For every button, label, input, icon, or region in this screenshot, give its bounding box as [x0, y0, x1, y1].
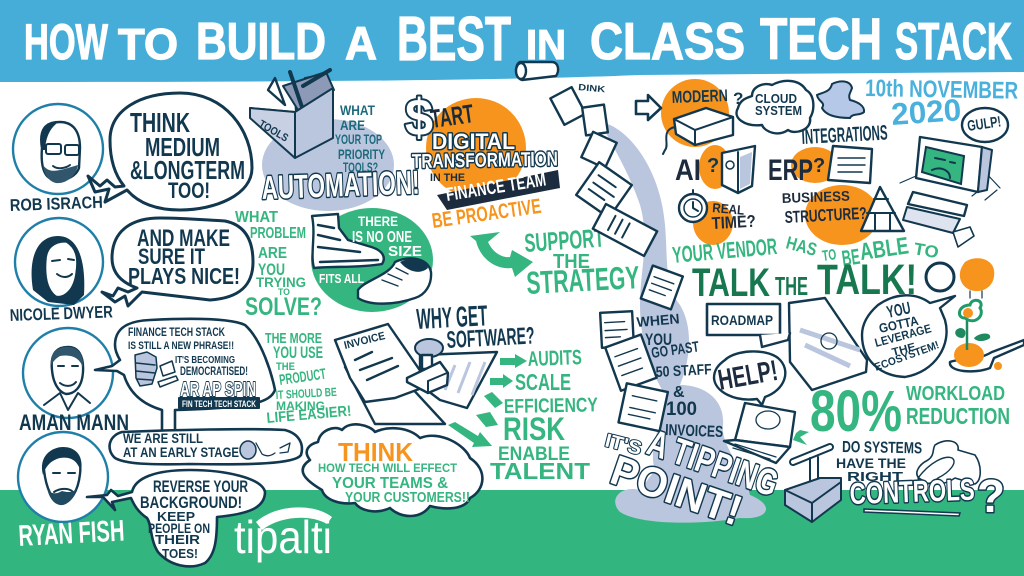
text: your vendor has to be able to: HAS — [784, 233, 819, 260]
invoice 9 — [618, 383, 668, 431]
text: there is no one size: IS NO ONE — [352, 229, 412, 246]
text: your vendor has to be able to — [671, 232, 940, 271]
question: what are your top priority tools: TOOLS? — [343, 159, 378, 175]
speech bubble: and make sure it plays nice — [102, 218, 253, 306]
invoice sheet: INVOICE — [343, 330, 386, 352]
portrait: Aman — [23, 328, 113, 418]
banner: finance team — [437, 169, 560, 210]
arrow: roadmap pointer — [760, 333, 790, 347]
text: support the strategy: THE — [553, 251, 590, 273]
speech bubble: finance tech stack: DEMOCRATISED! — [180, 364, 248, 378]
portrait: Ryan — [18, 432, 108, 522]
name: Aman Mann: AMAN MANN — [19, 410, 129, 435]
speech bubble: reverse your background — [87, 470, 265, 566]
speech bubble: and make sure it plays nice: PLAYS NICE! — [128, 263, 240, 289]
speech bubble: finance tech stack: IT'S BECOMING — [175, 355, 235, 366]
topic: real time: TIME? — [711, 212, 756, 233]
text: be proactive: BE PROACTIVE — [430, 195, 543, 233]
icon: map — [789, 298, 867, 390]
arrow: 80% to laptop — [793, 430, 809, 445]
title banner: BEST — [397, 5, 511, 74]
speech bubble: finance tech stack: FIN TECH TECH STACK — [182, 399, 256, 409]
text: when you go past: INVOICES — [665, 422, 724, 441]
name: Rob Israch: ROB ISRACH — [9, 193, 103, 215]
text: there is no one size: SIZE — [388, 243, 422, 260]
heading: talk the talk: THE — [775, 271, 808, 301]
right-top: modern: ? — [733, 89, 743, 108]
speech bubble: think medium and long term: THINK — [130, 107, 190, 138]
topic: AI: AI — [675, 154, 701, 187]
topic: business structure: BUSINESS — [782, 188, 850, 206]
speech bubble: you gotta leverage the ecosystem: GOTTA — [878, 313, 920, 336]
topic: ERP: ? — [813, 155, 825, 177]
icon: laptop — [724, 403, 795, 463]
speech bubble: finance tech stack — [95, 319, 275, 432]
invoice 5 — [593, 204, 657, 256]
title banner: IN — [526, 21, 566, 68]
speech bubble: reverse your background: TOES! — [162, 546, 198, 561]
text: do systems have the right: HAVE THE — [836, 455, 906, 471]
topic: real time — [679, 190, 756, 245]
panel: Rob Israch — [9, 93, 252, 215]
invoice 6 — [641, 266, 683, 309]
heading: it's a tipping point — [603, 422, 783, 534]
icon: toolbox — [250, 70, 334, 158]
invoice 3 — [581, 132, 617, 168]
speech bubble: reverse your background: BACKGROUND! — [140, 493, 242, 512]
list: software benefits — [490, 346, 599, 484]
speech bubble: you gotta leverage the ecosystem: ECOSYSTEM! — [873, 339, 941, 374]
cloud: think how tech will affect: THINK — [338, 437, 413, 467]
question: what problem are you trying to solve: WHAT — [235, 209, 278, 226]
list: software benefits: ENABLE — [498, 444, 570, 465]
text: your vendor has to be able to: TO — [912, 239, 940, 262]
text: support the strategy: STRATEGY — [525, 259, 640, 301]
cloud: think how tech will affect: HOW TECH WILL EFFECT — [318, 461, 458, 475]
speech bubble: finance tech stack: IS STILL A NEW PHRASE!! — [128, 340, 234, 352]
speech bubble: finance tech stack: FINANCE TECH STACK — [128, 325, 225, 339]
label: dink: DINK — [578, 82, 606, 94]
name: Ryan Fish: RYAN FISH — [18, 514, 125, 553]
cloud: think how tech will affect: YOUR TEAMS & — [332, 475, 448, 492]
speech bubble: think medium and long term: MEDIUM — [145, 132, 220, 162]
speech bubble: and make sure it plays nice: SURE IT — [138, 244, 205, 269]
text: there is no one size: THERE — [358, 213, 398, 229]
text: when you go past: GO PAST — [650, 338, 700, 362]
icon: cloud system: SYSTEM — [755, 104, 802, 118]
icon: outline arrow — [636, 95, 661, 120]
topic: business structure — [782, 185, 904, 245]
text: the more you use the product: LIFE EASIER! — [266, 403, 352, 427]
icon: toilet roll — [240, 441, 290, 459]
invoice sheet — [335, 324, 430, 402]
text: the more you use the product: YOU USE — [273, 343, 323, 362]
panel: no one size fits all — [311, 208, 433, 312]
title banner: CLASS — [590, 13, 745, 71]
text: support the strategy: SUPPORT — [523, 222, 605, 258]
text: there is no one size: FITS ALL — [319, 271, 364, 286]
speech bubble: think medium and long term: TOO! — [168, 178, 210, 203]
text: the more you use the product: PRODUCT — [278, 366, 327, 389]
topic: AI — [675, 145, 755, 193]
question: what problem are you trying to solve: ARE — [258, 245, 287, 262]
speech bubble: think medium and long term: &LONGTERM — [130, 155, 245, 185]
question: what are your top priority tools: YOUR TOP — [335, 131, 382, 147]
text: integrations: INTEGRATIONS — [801, 122, 888, 149]
panel: start digital transformation: DIGITAL — [432, 129, 515, 154]
speech bubble: help: HELP! — [716, 355, 780, 397]
cloud: think how tech will affect: YOUR CUSTOMERS!! — [345, 489, 470, 506]
text: your vendor has to be able to: BE — [840, 244, 862, 271]
topic: business structure: STRUCTURE? — [784, 204, 867, 227]
list: software benefits: EFFICIENCY — [504, 394, 599, 418]
speech bubble: you gotta leverage the ecosystem: THE — [891, 341, 917, 359]
text: do systems have the right: RIGHT — [847, 469, 903, 484]
list: software benefits: TALENT — [490, 458, 590, 484]
label: roadmap — [707, 304, 780, 335]
speech bubble: reverse your background: REVERSE YOUR — [153, 477, 248, 496]
panel: gulp computer — [900, 108, 1008, 247]
icon: stack of blocks and computer — [135, 352, 178, 387]
green arrows — [448, 354, 527, 447]
icon: cloud system — [737, 81, 813, 133]
question: what are your top priority tools — [335, 102, 385, 175]
arrow: to support the strategy — [470, 232, 533, 277]
panel: Nicole Dwyer — [9, 218, 253, 325]
speech bubble: finance tech stack: AR AP SPIN — [180, 379, 256, 401]
speech bubble: you gotta leverage the ecosystem: LEVERAGE — [873, 321, 933, 350]
heading: it's a tipping point: A TIPPING — [642, 422, 783, 505]
icon: puzzle piece — [817, 81, 864, 118]
question: what are your top priority tools: ARE — [340, 117, 365, 133]
panel: start digital transformation: TRANSFORMATION — [412, 148, 558, 173]
text: there is no one size — [319, 213, 422, 286]
speech bubble: we are still at an early stage: AT AN EARLY STAGE — [123, 444, 239, 460]
question: what are your top priority tools: PRIORITY — [338, 146, 385, 162]
question: what problem are you trying to solve: YOU — [258, 260, 285, 279]
portrait: Rob — [13, 104, 103, 194]
heading: it's a tipping point: POINT! — [605, 446, 748, 534]
text: when you go past: YOU — [645, 330, 672, 349]
speech bubble: you gotta leverage the ecosystem — [862, 295, 955, 377]
topic: real time: REAL — [712, 200, 745, 218]
speech bubble: reverse your background: PEOPLE ON — [148, 520, 210, 536]
text: your vendor has to be able to: TO — [821, 246, 838, 265]
invoice chain — [550, 87, 683, 431]
right-top: modern — [636, 79, 743, 154]
logo: tipalti: tipalti — [234, 511, 332, 563]
icon: plant on trowel — [950, 300, 1024, 371]
icon: paper roll — [516, 62, 558, 80]
icon: stopwatch — [679, 190, 707, 222]
heading: talk the talk: TALK — [692, 261, 770, 305]
text: when you go past: & — [673, 384, 685, 401]
speech bubble: we are still at an early stage — [110, 429, 302, 464]
heading: talk the talk — [692, 256, 917, 305]
icon: document — [828, 146, 872, 183]
speech bubble: and make sure it plays nice: AND MAKE — [137, 225, 230, 252]
heading: why get software — [416, 300, 535, 354]
back sheets — [345, 352, 497, 424]
stat: 80% workload reduction: WORKLOAD — [906, 383, 1005, 405]
icon: old computer — [900, 137, 1000, 247]
text: the more you use the product: IT SHOULD BE — [275, 385, 337, 402]
topic: ERP — [768, 146, 872, 187]
name: Nicole Dwyer: NICOLE DWYER — [9, 302, 113, 325]
text: the more you use the product — [265, 330, 352, 427]
icon: tower speaker — [722, 146, 755, 193]
title banner — [0, 0, 1024, 82]
green footer band — [0, 490, 1024, 576]
invoice 8 — [605, 335, 657, 391]
icon: pyramid — [861, 187, 904, 231]
stat: 80% workload reduction: 80% — [810, 379, 902, 444]
text: your vendor has to be able to: ABLE — [858, 232, 910, 266]
list: software benefits: RISK — [503, 411, 565, 447]
question: what problem are you trying to solve: PROBLEM — [250, 225, 306, 242]
title banner: BUILD — [196, 13, 326, 71]
roadmap — [707, 298, 867, 390]
blob behind automation — [262, 119, 394, 211]
banner: finance team: FINANCE TEAM — [444, 169, 548, 206]
heading: why get software: SOFTWARE? — [446, 322, 535, 354]
text: your vendor has to be able to: YOUR VENDOR — [671, 233, 778, 268]
text: when you go past: 100 — [666, 399, 697, 420]
text: when you go past: 50 STAFF — [655, 361, 712, 381]
icon: game controller puzzle — [917, 441, 980, 484]
text: do systems have the right: DO SYSTEMS — [842, 439, 922, 457]
title banner: TECH — [760, 7, 882, 72]
panel: Aman Mann — [19, 319, 302, 464]
label: roadmap: ROADMAP — [711, 312, 773, 328]
date: 2020 — [890, 92, 962, 132]
cloud: think how tech will affect — [303, 424, 482, 516]
text: when you go past: WHEN — [636, 310, 680, 330]
text: the more you use the product: THE — [276, 361, 295, 373]
speech bubble: we are still at an early stage: WE ARE STILL — [123, 430, 203, 446]
speech bubble: reverse your background: THEIR — [155, 532, 201, 547]
list: software benefits: AUDITS — [527, 346, 582, 371]
title banner: HOW — [24, 14, 109, 70]
title banner: A — [345, 17, 377, 69]
icon: orange chick — [960, 258, 994, 298]
text: do systems have the right — [836, 439, 922, 484]
icon: server box — [663, 108, 733, 154]
invoice 7 — [600, 311, 634, 348]
question: what are your top priority tools: WHAT — [340, 102, 375, 118]
icon: ring — [926, 263, 954, 291]
topic: AI: ? — [707, 155, 719, 177]
invoice 2 — [582, 105, 608, 135]
text: when you go past — [636, 310, 724, 441]
heading: talk the talk: TALK! — [817, 256, 917, 304]
heading: why get software: WHY GET — [416, 300, 488, 336]
panel: start digital transformation: TART — [429, 98, 475, 134]
question: what problem are you trying to solve: TRYING — [256, 274, 306, 290]
icon: cloud system: CLOUD — [755, 92, 797, 106]
icon: joystick box — [785, 447, 841, 522]
question: what problem are you trying to solve — [235, 209, 322, 321]
heading: it's a tipping point: IT'S — [603, 430, 644, 460]
panel: start digital transformation: IN THE — [430, 172, 465, 184]
speech bubble: help — [714, 351, 785, 405]
speech bubble: you gotta leverage the ecosystem: YOU — [885, 298, 912, 322]
icon: dollar sign: $ — [405, 89, 433, 147]
invoice 1 — [550, 87, 586, 125]
title banner: TO — [118, 20, 178, 69]
heading: controls: CONTROLS — [849, 474, 975, 511]
topic: ERP: ERP — [768, 154, 813, 187]
icon: stamp — [407, 339, 448, 393]
text: support the strategy — [523, 222, 640, 301]
heading: automation: AUTOMATION! — [261, 164, 420, 206]
invoice 4 — [576, 162, 632, 218]
question: what problem are you trying to solve: TO — [278, 287, 290, 297]
heading: controls: ? — [977, 470, 1005, 522]
question: what problem are you trying to solve: SOLVE? — [245, 293, 322, 321]
stat: 80% workload reduction — [810, 379, 1010, 444]
icon: sneaker — [312, 214, 384, 268]
invoice swoosh — [600, 122, 766, 523]
icon: dress shoe — [358, 258, 431, 304]
speech bubble: gulp: GULP! — [966, 113, 1002, 135]
text: the more you use the product: THE MORE — [265, 330, 322, 347]
right-top: modern: MODERN — [671, 86, 728, 107]
portrait: Nicole — [15, 218, 103, 306]
icon: toolbox: TOOLS — [256, 118, 290, 145]
text: the more you use the product: MAKING — [276, 399, 325, 413]
panel: start digital transformation — [405, 89, 560, 233]
date — [865, 75, 1018, 132]
speech bubble: reverse your background: KEEP — [157, 509, 195, 524]
list: software benefits: SCALE — [515, 369, 571, 395]
panel: Ryan Fish — [18, 432, 265, 566]
invoice illustration: why get software — [335, 324, 497, 424]
speech bubble: think medium and long term — [88, 93, 252, 210]
